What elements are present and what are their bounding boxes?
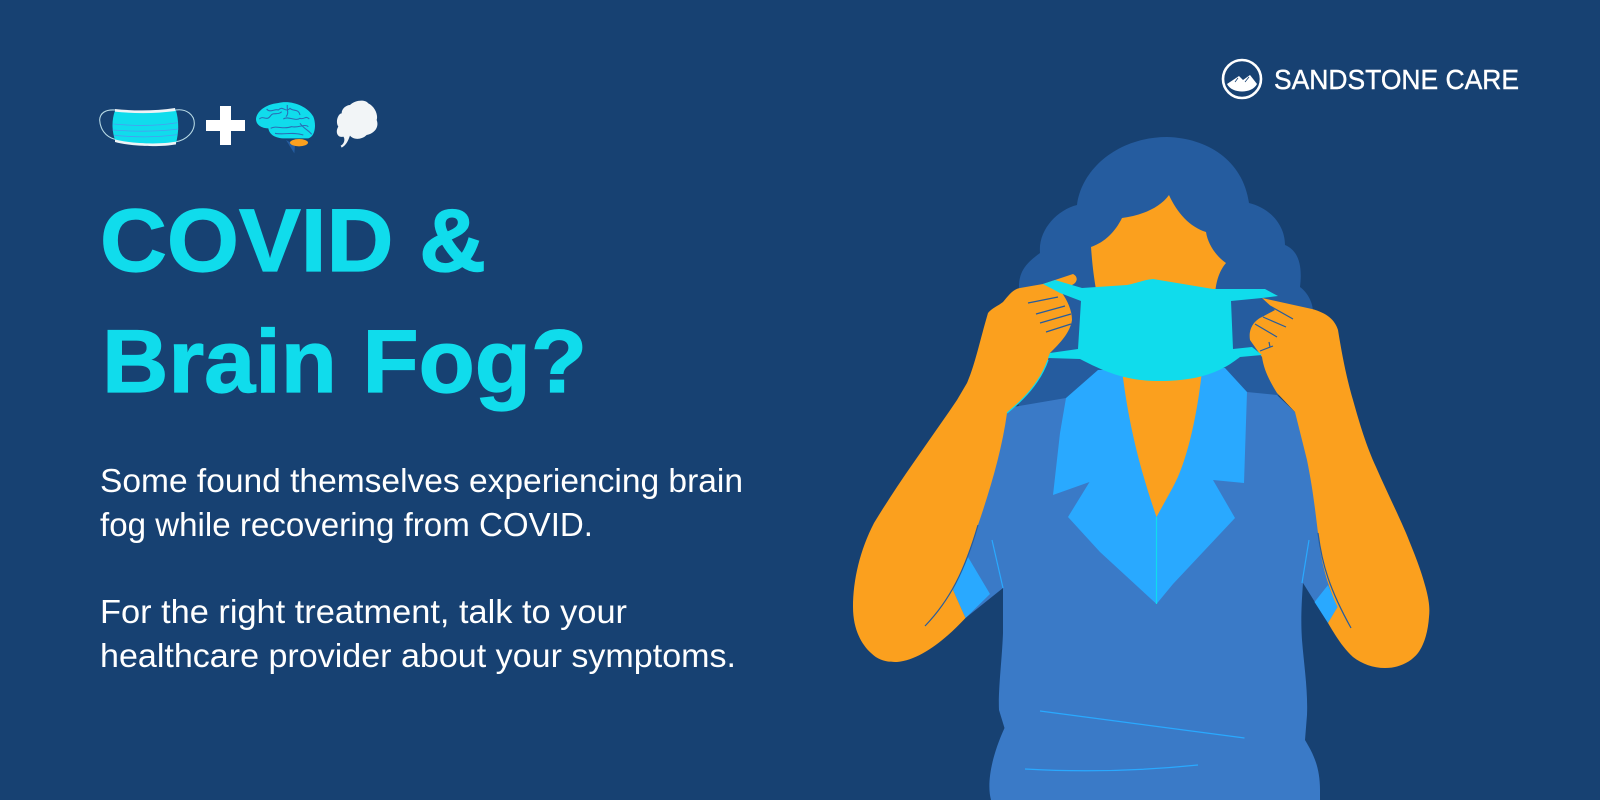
face mask (1043, 279, 1278, 381)
body text: Some found themselves experiencing brain (100, 462, 743, 499)
shirt (953, 392, 1340, 800)
face (1091, 195, 1226, 295)
shirt centre seam (1156, 517, 1158, 604)
title: Brain Fog? (102, 311, 587, 411)
illustration: woman holding a mask (853, 137, 1429, 800)
right arm (1250, 298, 1429, 668)
icon: plus (206, 106, 245, 145)
icon: fog cloud (337, 101, 377, 148)
hair (1000, 137, 1313, 410)
neck (1122, 370, 1202, 517)
mask strap edge (1007, 360, 1048, 413)
finger lines (1028, 297, 1293, 351)
sleeve cuffs (953, 557, 1338, 623)
body text: healthcare provider about your symptoms. (100, 637, 736, 674)
title (100, 190, 587, 411)
logo: Sandstone Care: SANDSTONE CARE (1274, 64, 1519, 95)
body text: For the right treatment, talk to your (100, 593, 627, 630)
title: COVID & (100, 190, 486, 290)
logo: Sandstone Care (1223, 60, 1519, 98)
icon: brain (256, 102, 315, 153)
body text (100, 462, 743, 674)
left arm (853, 274, 1077, 662)
arm crease lines (925, 525, 1351, 628)
body text: fog while recovering from COVID. (100, 506, 593, 543)
fabric fold lines (992, 540, 1309, 771)
collar (1053, 368, 1247, 604)
icon: surgical mask (100, 108, 194, 146)
icon row: mask plus brain and fog (100, 101, 377, 153)
